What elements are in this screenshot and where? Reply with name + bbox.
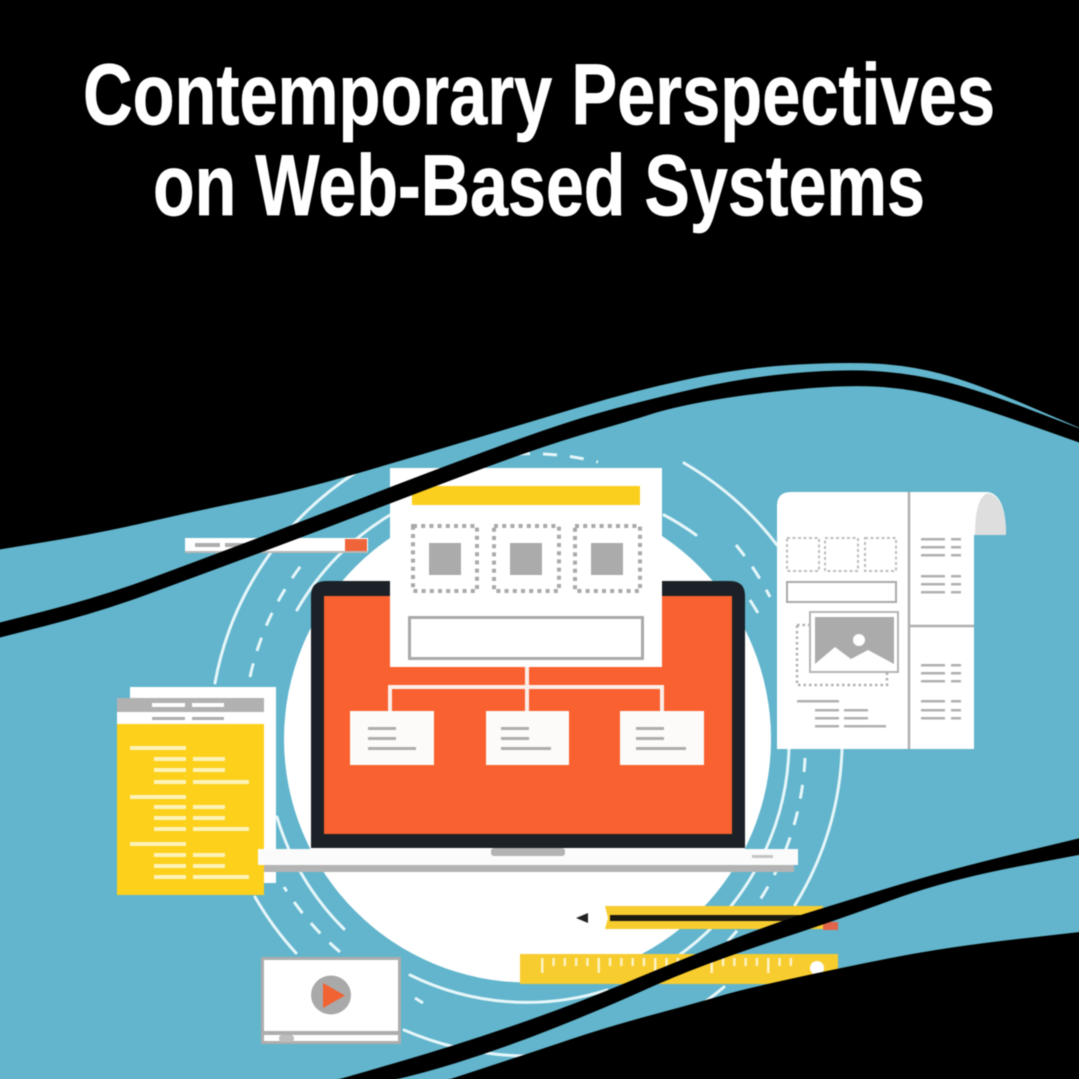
laptop display <box>311 581 745 848</box>
progress knob <box>279 1035 294 1042</box>
lower black swoosh <box>300 836 1079 1079</box>
column text lines <box>797 538 961 728</box>
sitemap connector lines <box>390 660 662 712</box>
laptop screen <box>324 596 732 834</box>
dotted image frame <box>797 625 887 685</box>
pencil eraser <box>823 922 838 930</box>
white central circle <box>284 496 771 982</box>
title <box>83 47 995 234</box>
laptop bezel <box>311 581 745 848</box>
ruler <box>520 954 838 984</box>
pencil body <box>605 906 823 929</box>
scroll curl <box>975 493 1006 535</box>
code lines <box>130 746 249 879</box>
grey title bar <box>117 698 264 712</box>
orbit rings <box>215 454 842 1056</box>
search bar <box>185 538 368 553</box>
ruler hole <box>810 961 824 975</box>
play button <box>311 976 351 1014</box>
page sheet <box>390 468 662 667</box>
field <box>787 582 896 602</box>
yellow code document <box>117 698 264 895</box>
yellow sheet <box>117 724 264 895</box>
pencil tip <box>576 913 588 923</box>
blue background panel <box>0 340 1079 1079</box>
pencil <box>576 906 838 930</box>
scroll dividers <box>909 492 974 749</box>
code document back sheet <box>130 687 276 883</box>
scroll sheet <box>777 492 1006 749</box>
dotted boxes <box>787 538 896 571</box>
upper black swoosh <box>0 370 1079 640</box>
black bottom corner <box>420 931 1079 1079</box>
sitemap boxes <box>350 711 704 765</box>
video player <box>262 958 400 1042</box>
yellow header bar <box>412 486 640 505</box>
image placeholder <box>810 612 898 672</box>
laptop base <box>258 848 798 872</box>
search button <box>345 539 367 551</box>
central web page wireframe <box>390 468 662 667</box>
dotted thumbnails <box>413 526 640 591</box>
ruler ticks <box>541 958 800 966</box>
scroll document <box>777 492 1006 749</box>
text field <box>410 618 642 658</box>
black top band <box>0 0 1079 551</box>
